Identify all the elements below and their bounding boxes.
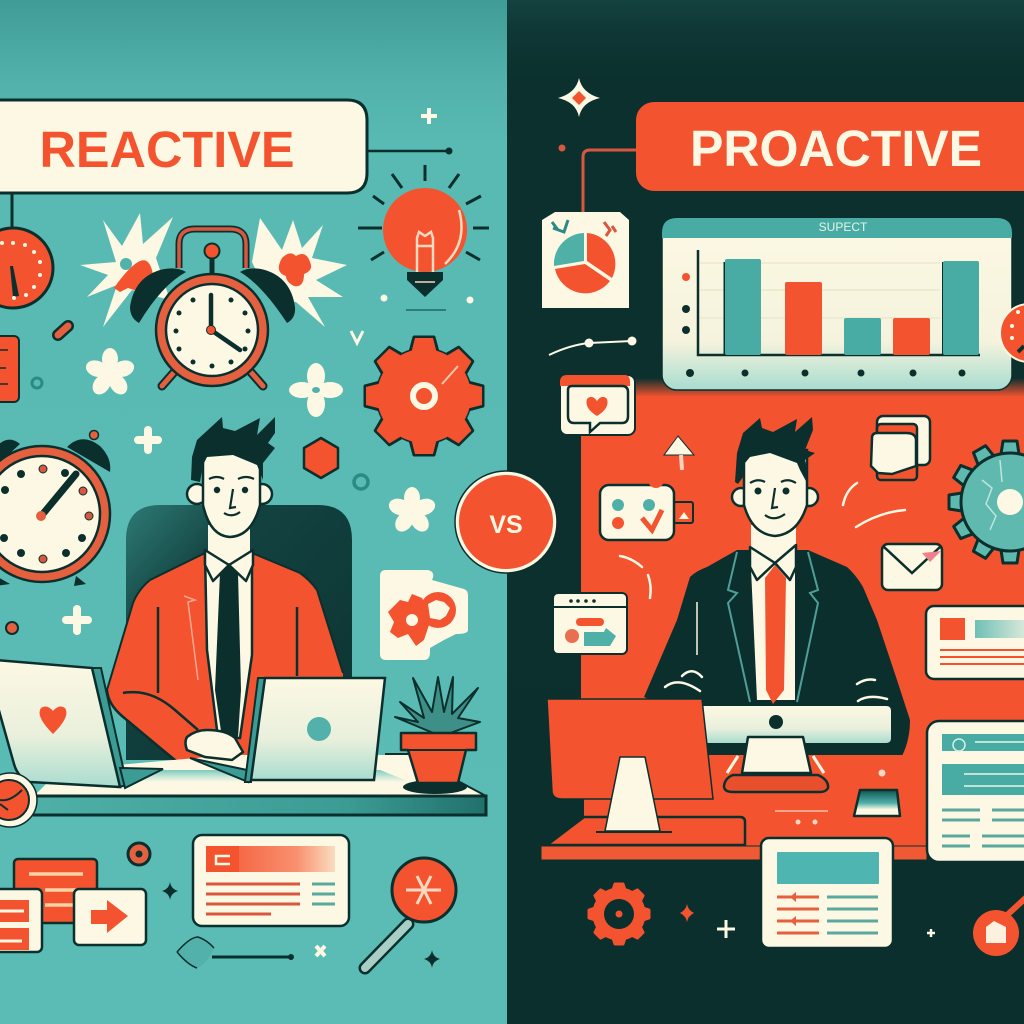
icon: small motion marks: [620, 483, 905, 701]
neck: [208, 525, 250, 566]
chart: bar chart panel: [662, 218, 1012, 390]
tie: [765, 565, 786, 704]
card: proactive info right: [926, 606, 1024, 679]
badge: VS: [455, 471, 557, 573]
shirt: [750, 547, 795, 700]
hand: reactive: [186, 730, 243, 760]
ears: [187, 484, 207, 504]
icon: chat heart card: [560, 375, 635, 435]
icon: timeline squiggle: [549, 336, 636, 355]
icon: eye with line: [177, 937, 294, 968]
panel: reactive background: [0, 0, 507, 1024]
hair: [191, 417, 275, 482]
neck: [751, 525, 796, 563]
heading: proactive: [558, 102, 1024, 212]
laptop: reactive right: [190, 678, 385, 782]
heading: proactive: PROACTIVE: [690, 120, 982, 177]
badge: VS: VS: [489, 511, 523, 539]
face: [744, 450, 807, 536]
person: reactive: [107, 417, 352, 762]
panel: proactive background: [507, 0, 1024, 1024]
icon: pie chart card: [542, 212, 629, 308]
icon: light bulb: [351, 165, 489, 343]
icon: puzzle gear card: [380, 570, 468, 660]
icon: home pin bottom right: [973, 894, 1024, 956]
card: proactive document center: [761, 838, 893, 948]
icon: gauge right edge: [1000, 304, 1024, 362]
laptop: reactive left: [0, 660, 163, 788]
icon: red dial top left: [0, 192, 53, 308]
shirt: [205, 553, 252, 738]
card: proactive document right: [927, 721, 1024, 862]
face: [203, 450, 260, 537]
icon: small sparkle: [162, 882, 178, 900]
icon: flower right: [387, 487, 437, 535]
icon: small cross: [316, 946, 325, 956]
tie: [215, 563, 241, 738]
chart: bar chart panel: SUPECT: [819, 220, 868, 234]
icon: small sparkle right: [424, 950, 440, 968]
icon: flower left: [84, 348, 136, 398]
icon: magnifying glass: [365, 858, 456, 968]
icon: potted plant: [395, 677, 480, 794]
icon: splash right: [252, 218, 347, 327]
heading: reactive: [0, 100, 452, 193]
collar: [205, 550, 253, 581]
icon: sparkle top right panel: [558, 78, 600, 117]
icon: red badge left: [0, 773, 37, 827]
icon: flower centre: [289, 363, 343, 417]
person: proactive: [644, 417, 910, 756]
icon: up arrow: [664, 436, 694, 470]
jacket: [107, 553, 343, 760]
icon: large alarm clock left: [0, 430, 110, 586]
hair: [735, 417, 815, 484]
desk: reactive: [30, 754, 487, 815]
card: reactive document: [193, 835, 349, 926]
icon: red note left edge: [0, 336, 19, 402]
collar: [750, 545, 796, 580]
icon: small plus marks bottom: [680, 904, 935, 938]
icon: alarm clock top: [130, 229, 295, 386]
jacket: [644, 550, 910, 756]
icon: apps card: [600, 472, 693, 540]
icon: message cards bottom left: [0, 859, 146, 952]
icon: stacked cards: [871, 416, 930, 480]
desk: proactive: [541, 755, 927, 860]
monitor: proactive left: [547, 699, 713, 832]
icon: small shapes reactive: [6, 326, 368, 865]
chair: [126, 505, 352, 760]
icon: gear reactive: [365, 337, 483, 455]
icon: gear proactive: [949, 441, 1024, 563]
icon: browser window: [553, 593, 627, 654]
monitor: proactive center: [703, 706, 891, 792]
ears: [732, 488, 750, 506]
icon: splash left: [80, 213, 173, 327]
heading: reactive: REACTIVE: [40, 121, 294, 178]
icon: envelope: [882, 544, 942, 590]
icon: sparkle plus: [421, 108, 437, 124]
icon: gear bottom: [589, 884, 649, 944]
